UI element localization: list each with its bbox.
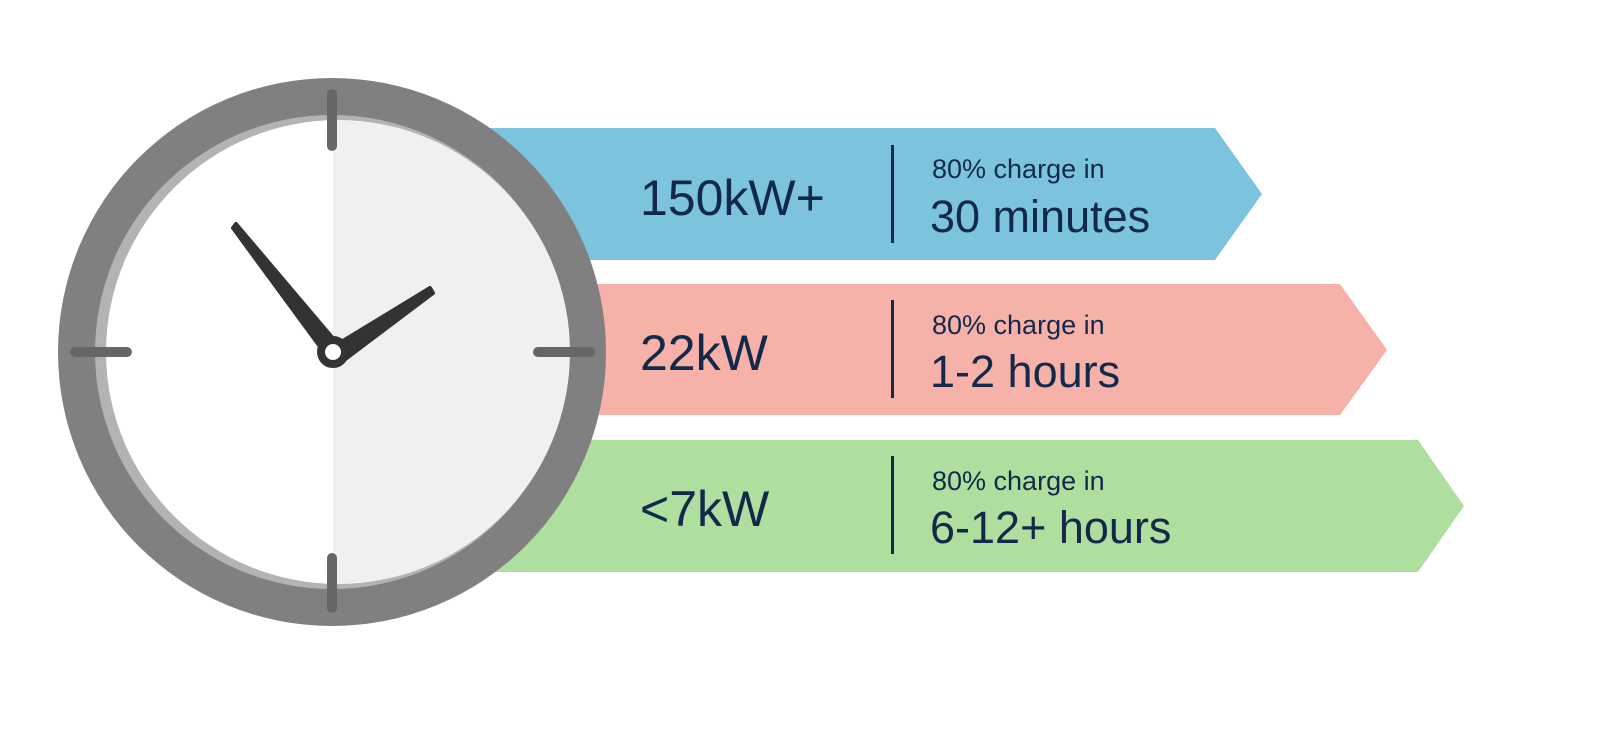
text: 1-2 hours: 1-2 hours (930, 346, 1120, 397)
text: 6-12+ hours: 80% charge in (932, 466, 1105, 496)
text: 1-2 hours (930, 310, 1120, 397)
arrow: <7kW banner (490, 440, 1464, 572)
clock hands (233, 224, 433, 366)
text: 6-12+ hours: 6-12+ hours (930, 502, 1171, 553)
label: <7kW: <7kW (640, 481, 770, 537)
icon: clock (58, 78, 606, 626)
text: 30 minutes: 30 minutes (930, 191, 1150, 242)
text: 30 minutes (930, 154, 1150, 242)
label: 150kW+: 150kW+ (640, 170, 825, 226)
text: 6-12+ hours (930, 466, 1171, 553)
arrow: 150kW+ banner (490, 128, 1262, 260)
arrow: 22kW banner (560, 284, 1387, 415)
text: 1-2 hours: 80% charge in (932, 310, 1105, 340)
label: 22kW: 22kW (640, 325, 769, 381)
text: 30 minutes: 80% charge in (932, 154, 1105, 184)
